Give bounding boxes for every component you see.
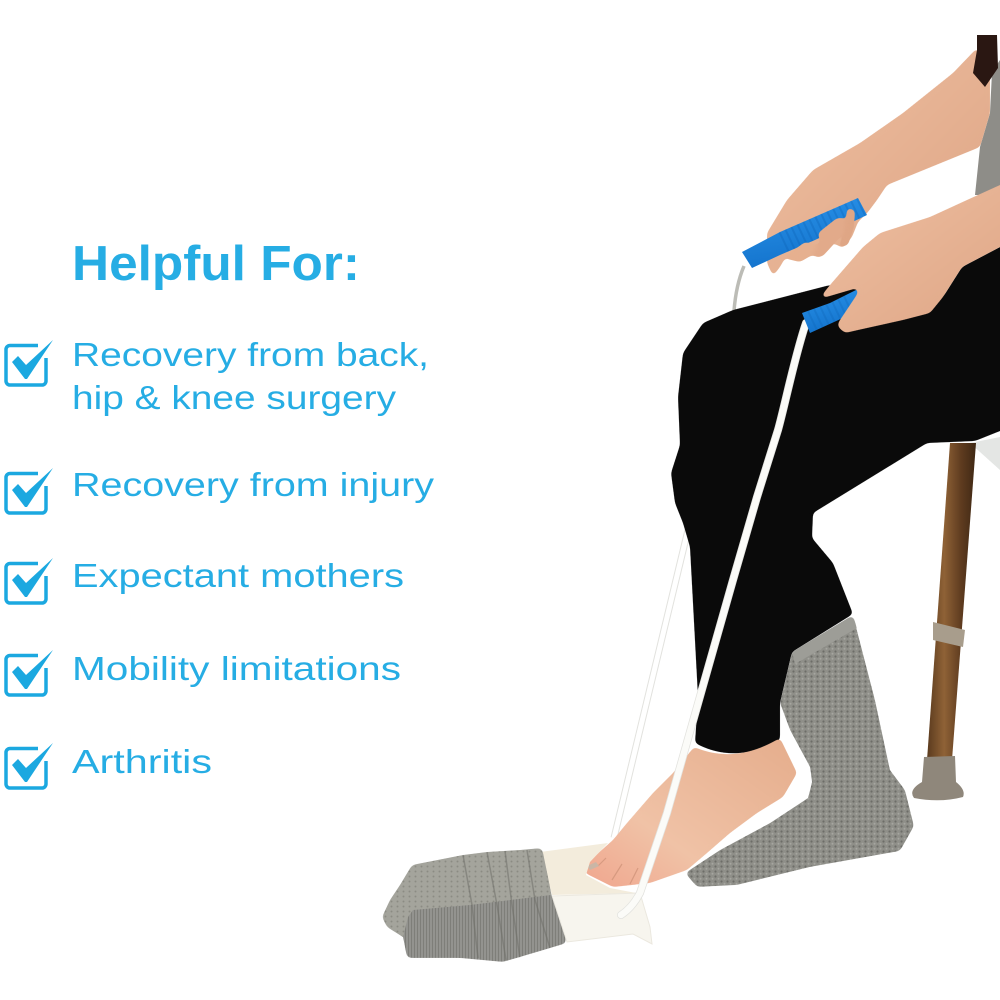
icon: checkbox xyxy=(6,340,53,385)
heading: Helpful For: Helpful For: xyxy=(72,237,360,291)
item: recovery from surgery xyxy=(6,336,429,416)
long rope xyxy=(621,323,806,915)
front arm and hand xyxy=(822,172,1000,333)
item: arthritis xyxy=(6,743,212,788)
rear handle xyxy=(742,198,867,268)
text: recovery from back, hip and knee surgery: Recovery from back, xyxy=(72,336,429,373)
front handle xyxy=(802,288,860,333)
rear rope xyxy=(734,266,744,311)
chair seat and leg xyxy=(912,437,1000,800)
text: mobility limitations: Mobility limitations xyxy=(72,650,401,687)
sock aid xyxy=(540,843,652,944)
icon: checkbox xyxy=(6,650,53,695)
illustration: person using sock aid xyxy=(382,35,1000,962)
black leggings xyxy=(671,232,1000,753)
rear arm and hand xyxy=(767,48,990,276)
sock on sock aid xyxy=(382,848,567,962)
text: recovery from back, hip and knee surgery: hip & knee surgery xyxy=(72,379,397,416)
checklist xyxy=(6,336,435,788)
icon: checkbox xyxy=(6,558,53,603)
icon: checkbox xyxy=(6,743,53,788)
item: expectant mothers xyxy=(6,557,404,603)
long rope behind leg xyxy=(614,530,688,838)
rear sock on leg xyxy=(685,615,914,887)
bare foot xyxy=(585,738,797,887)
hair xyxy=(973,35,998,87)
item: recovery from injury xyxy=(6,466,435,513)
icon: checkbox xyxy=(6,468,53,513)
text: recovery from injury: Recovery from injury xyxy=(72,466,435,503)
item: mobility limitations xyxy=(6,650,401,695)
text: expectant mothers: Expectant mothers xyxy=(72,557,404,594)
text: arthritis: Arthritis xyxy=(72,743,212,780)
shirt xyxy=(975,60,1000,195)
rear hand fingers over handle xyxy=(783,208,855,262)
